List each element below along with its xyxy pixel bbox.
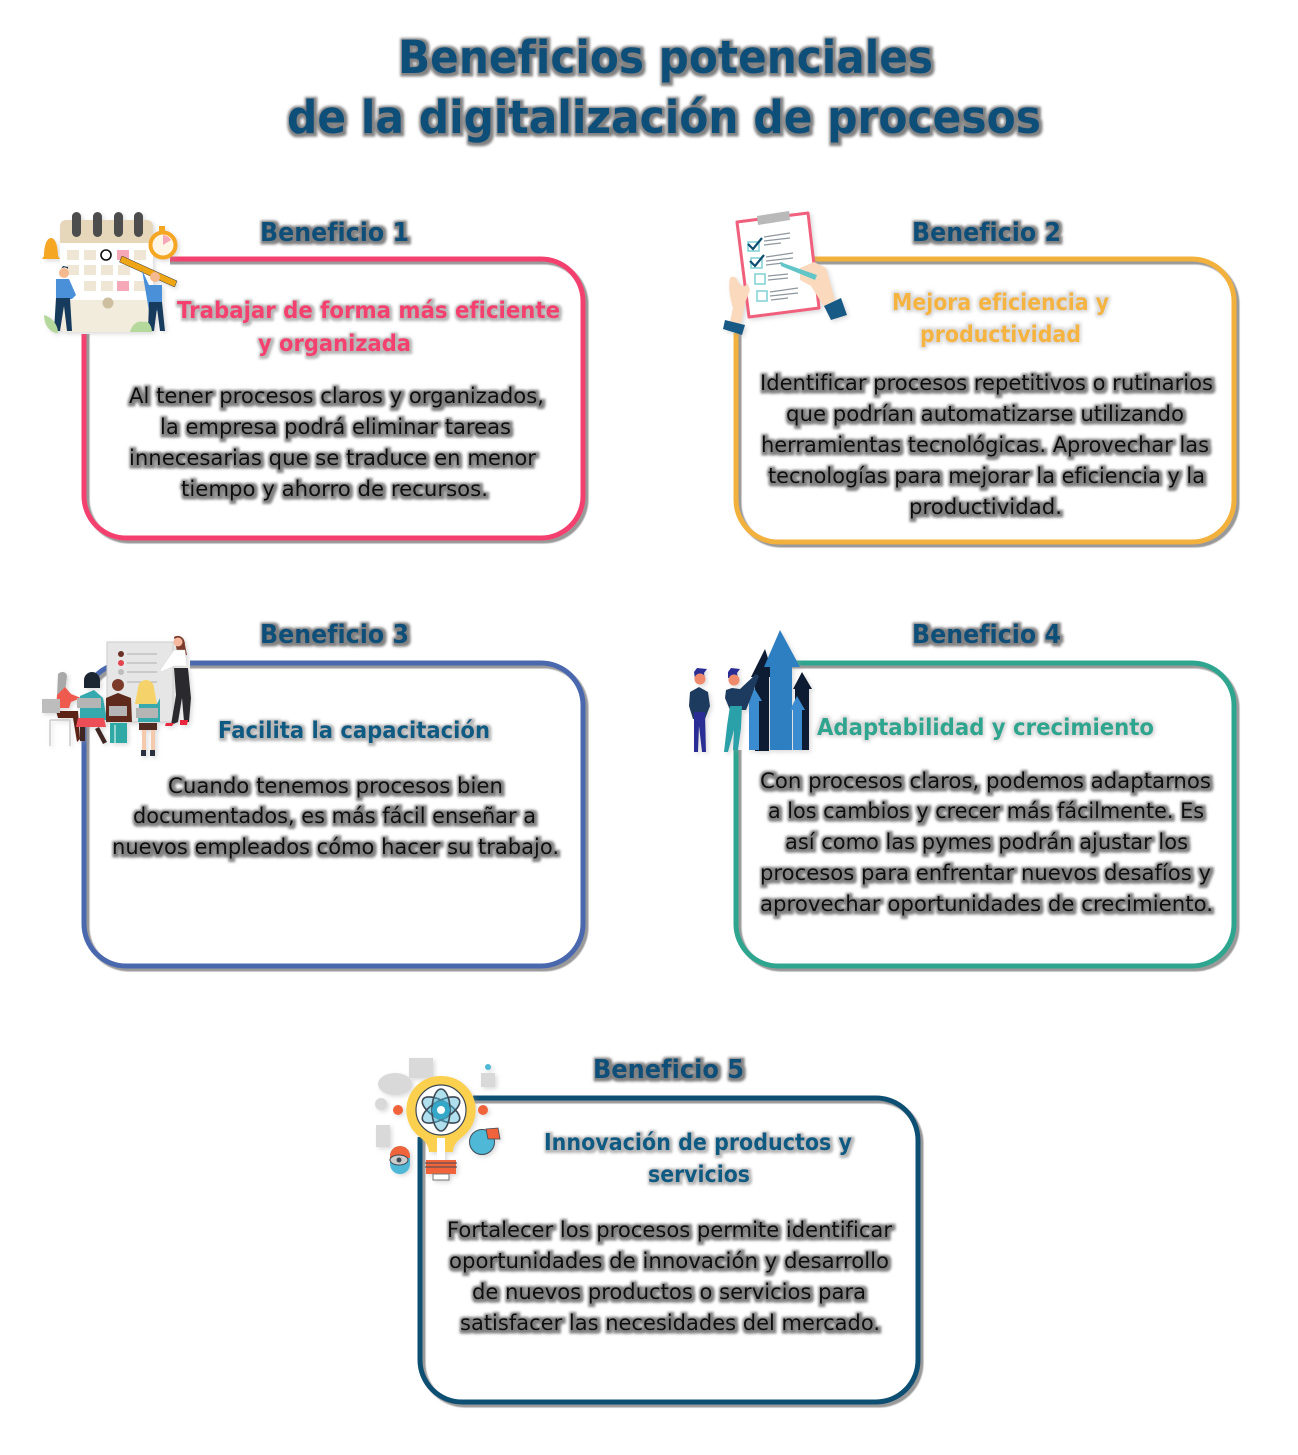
body text: beneficio 5 (447, 1218, 892, 1335)
icon part: clipboard (737, 213, 819, 317)
subtitle: beneficio 2: productividad (920, 322, 1081, 348)
subtitle: beneficio 1: Trabajar de forma más eficiente (177, 298, 560, 324)
icon part: audience seated (42, 672, 160, 756)
body text: beneficio 4 (760, 769, 1213, 916)
icon: clipboard with hands (723, 211, 847, 335)
subtitle: beneficio 2 (892, 290, 1109, 348)
icon part: plants (44, 315, 152, 333)
subtitle: beneficio 5 (544, 1130, 852, 1188)
icon part: checklist (748, 233, 798, 301)
icon: training session (42, 636, 191, 756)
body text: beneficio 2: herramientas tecnológicas. Aprovechar las (761, 433, 1209, 457)
subtitle: beneficio 1 (177, 298, 560, 357)
body text: beneficio 1: innecesarias que se traduce en menor (129, 446, 536, 470)
heading: beneficio 3: Beneficio 3 (260, 620, 409, 650)
icon part: right hand and pen (800, 262, 835, 308)
body text: beneficio 1: tiempo y ahorro de recursos. (181, 477, 488, 501)
body text: beneficio 4: Con procesos claros, podemos adaptarnos (760, 769, 1211, 793)
body text: beneficio 2 (760, 371, 1213, 519)
icon part: bulb (406, 1076, 476, 1152)
icon part: left hand (729, 277, 750, 327)
icon part: presentation board (107, 642, 173, 722)
icon part: arrows (751, 649, 774, 751)
icon part: bell (42, 238, 60, 259)
icon: growth arrows with two people (689, 630, 812, 752)
subtitle: beneficio 2: Mejora eficiencia y (892, 290, 1109, 316)
icon part: presenter (160, 636, 191, 726)
title: Beneficios potenciales (398, 31, 933, 84)
panel: beneficio 4 (689, 620, 1234, 966)
body text: beneficio 5: Fortalecer los procesos permite identificar (447, 1218, 892, 1242)
body text: beneficio 5: de nuevos productos o servicios para (472, 1280, 866, 1304)
icon part: pie chart (470, 1128, 500, 1154)
body text: beneficio 3: nuevos empleados cómo hacer su trabajo. (112, 835, 559, 859)
title: de la digitalización de procesos (287, 91, 1041, 144)
body text: beneficio 1: la empresa podrá eliminar tareas (160, 415, 511, 439)
icon part: cloud and gears (375, 1058, 495, 1147)
body text: beneficio 4: aprovechar oportunidades de crecimiento. (760, 892, 1213, 916)
body text: beneficio 3: documentados, es más fácil enseñar a (133, 804, 536, 828)
heading: beneficio 4: Beneficio 4 (912, 620, 1061, 650)
body text: beneficio 1: Al tener procesos claros y organizados, (129, 384, 544, 408)
body text: beneficio 3 (112, 774, 559, 859)
body text: beneficio 5: satisfacer las necesidades del mercado. (460, 1311, 880, 1335)
body text: beneficio 3: Cuando tenemos procesos bien (168, 774, 503, 798)
icon part: atom (418, 1089, 464, 1131)
subtitle: beneficio 3: Facilita la capacitación (218, 718, 490, 744)
subtitle: beneficio 1: y organizada (258, 331, 411, 357)
icon part: person right (724, 668, 759, 752)
icon part: pencil (120, 256, 177, 287)
body text: beneficio 2: Identificar procesos repetitivos o rutinarios (760, 371, 1213, 395)
body text: beneficio 4: procesos para enfrentar nuevos desafíos y (760, 861, 1211, 885)
icon part: person left (689, 668, 710, 752)
subtitle: beneficio 5: servicios (648, 1162, 750, 1188)
subtitle: beneficio 5: Innovación de productos y (544, 1130, 852, 1156)
body text: beneficio 4: a los cambios y crecer más fácilmente. Es (768, 799, 1204, 823)
body text: beneficio 1 (129, 384, 544, 501)
icon part: stopwatch (150, 226, 176, 258)
body text: beneficio 4: así como las pymes podrán ajustar los (785, 830, 1188, 854)
panel: beneficio 1 (42, 212, 583, 538)
title (287, 31, 1041, 144)
panel: beneficio 5 (375, 1055, 918, 1402)
panel border: beneficio 4 (736, 663, 1234, 966)
icon: light bulb with atom (375, 1058, 500, 1180)
heading: beneficio 2: Beneficio 2 (912, 218, 1061, 248)
panel: beneficio 3 (42, 620, 583, 966)
body text: beneficio 2: productividad. (909, 495, 1062, 519)
panel: beneficio 2 (723, 211, 1234, 542)
panel border: beneficio 3 (84, 663, 583, 966)
subtitle: beneficio 4: Adaptabilidad y crecimiento (817, 715, 1154, 741)
icon part: side dots (393, 1105, 403, 1115)
icon part: person right (142, 270, 165, 331)
heading: beneficio 1: Beneficio 1 (260, 218, 409, 248)
icon part: person left (54, 266, 76, 331)
panel border: beneficio 2 (736, 259, 1234, 542)
body text: beneficio 2: que podrían automatizarse utilizando (786, 402, 1184, 426)
panel border: beneficio 5 (420, 1098, 918, 1402)
icon part: bulb base (426, 1160, 456, 1174)
panel border: beneficio 1 (84, 259, 583, 538)
body text: beneficio 2: tecnologías para mejorar la eficiencia y la (768, 464, 1205, 488)
icon: calendar with two people (42, 212, 177, 334)
heading: beneficio 5: Beneficio 5 (593, 1055, 744, 1085)
icon part: eye capsule (390, 1146, 410, 1174)
body text: beneficio 5: oportunidades de innovación y desarrollo (449, 1249, 889, 1273)
